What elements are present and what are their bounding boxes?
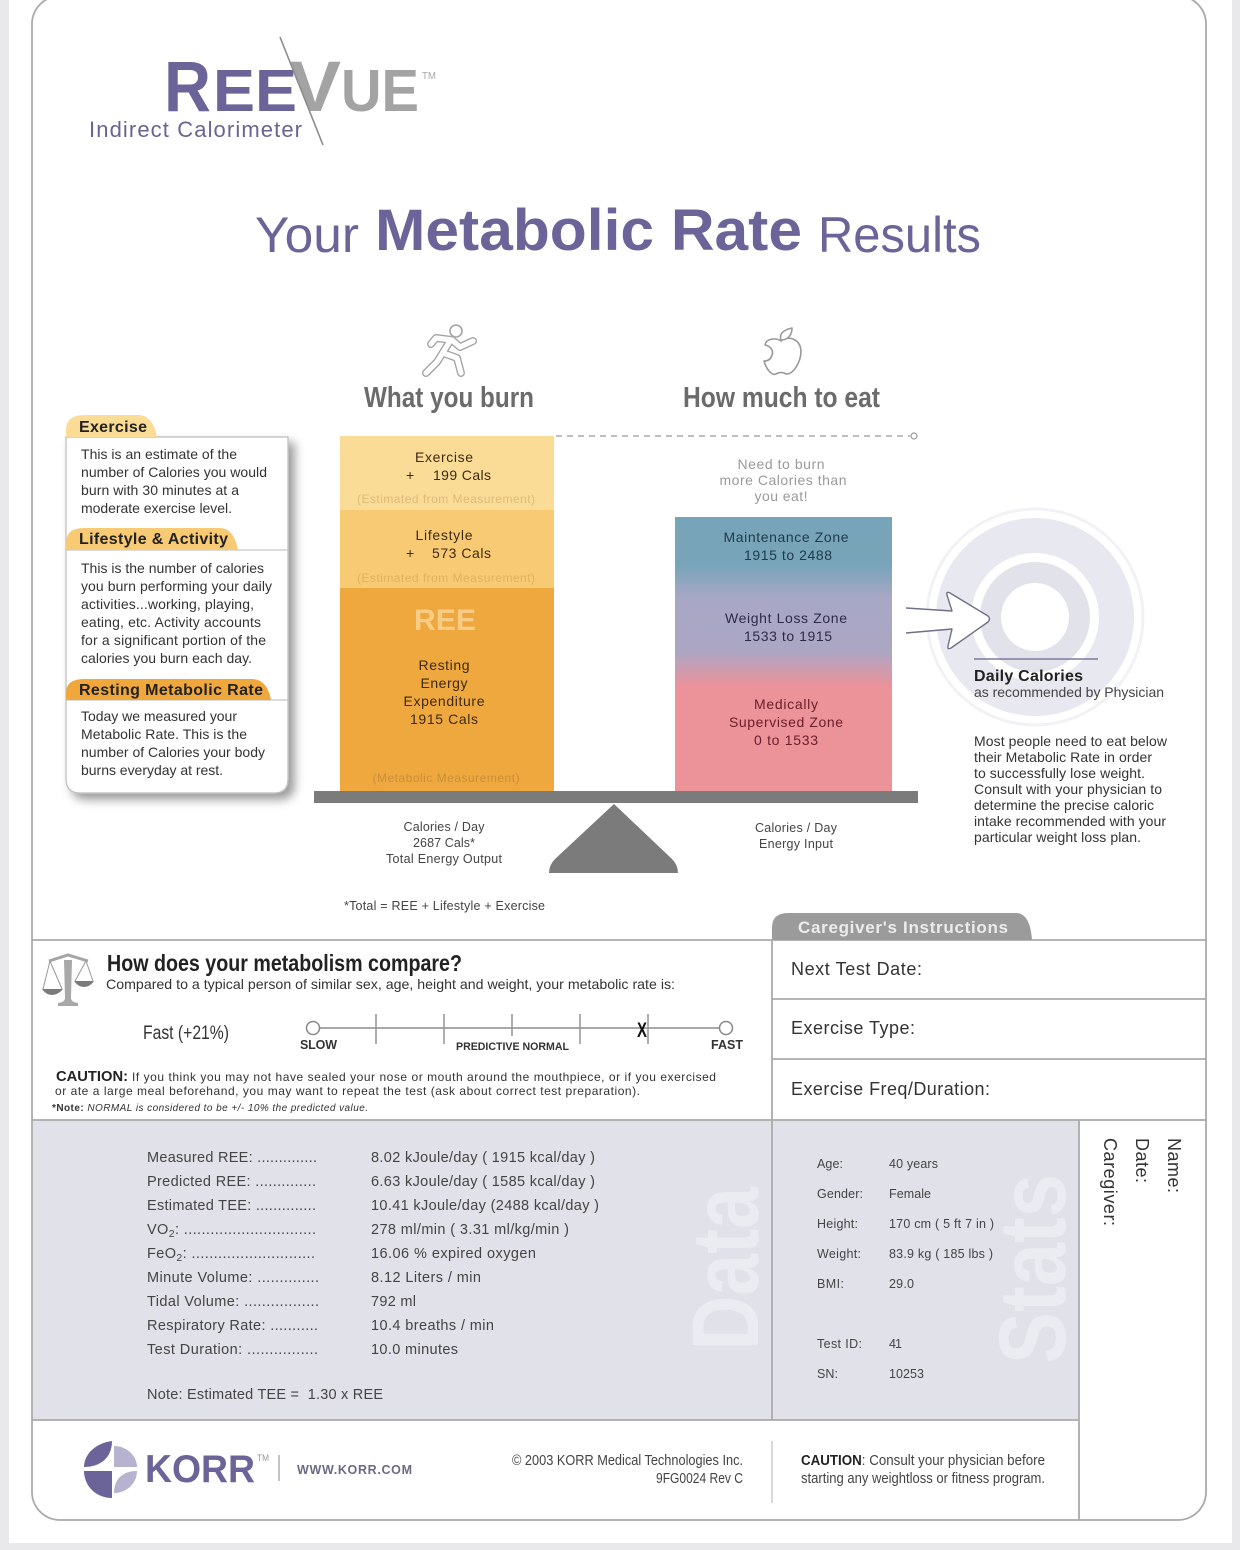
chart: calories burned stack: Exercise [415,449,473,465]
text: name, date, caregiver: Date: [1132,1138,1152,1183]
text: eating advice: particular weight loss plan. [974,829,1141,845]
panel: measured data: FeO [147,1246,176,1262]
chart: calories burned stack: 1915 Cals [410,711,478,727]
panel: measured data: 8.12 Liters / min [371,1270,481,1286]
panel: patient stats: 41 [889,1337,902,1351]
panel: measured data: 2 [176,1252,182,1264]
chart: calories burned stack: Expenditure [404,693,485,709]
panel: measured data: 792 ml [371,1294,416,1310]
text: need to burn: you eat! [754,488,808,504]
chart: metabolism slider [300,1014,743,1053]
panel: definitions: number of Calories you would [81,464,267,480]
text: eating advice: determine the precise caloric [974,797,1154,813]
panel: patient stats: 170 cm ( 5 ft 7 in ) [889,1217,994,1231]
panel: definitions: activities...working, playing, [81,596,254,612]
text: name, date, caregiver: Name: [1164,1138,1184,1193]
icon: target [927,509,1143,725]
dashed level line [556,433,917,439]
chart: calories burned stack: Lifestyle [416,527,473,543]
text: energy output: Total Energy Output [386,852,503,866]
chart: calorie zones stack: 1915 to 2488 [744,547,832,563]
text: name, date, caregiver [1100,1138,1184,1226]
chart: calories burned stack: + [406,467,414,483]
text: eating advice: Most people need to eat below [974,733,1168,749]
logo: ReeVue Indirect Calorimeter: R [164,48,211,127]
panel: definitions [66,415,288,793]
panel: measured data [147,1150,599,1403]
chart: calorie zones stack: 0 to 1533 [754,732,818,748]
text: comparison intro: Compared to a typical person of similar sex, age, height and weight, your metabolic rate is: [106,976,675,992]
panel: definitions: This is an estimate of the [81,446,237,462]
text: energy output: Calories / Day [404,820,485,834]
panel: measured data: Respiratory Rate: ........... [147,1318,318,1334]
panel: definitions: This is the number of calories [81,560,264,576]
panel: definitions: Today we measured your [81,708,237,724]
panel: measured data: 10.41 kJoule/day (2488 kcal/day ) [371,1198,599,1214]
icon: apple [764,328,801,374]
watermark: Stats: Stats [980,1174,1086,1364]
chart: calorie zones stack: 1533 to 1915 [744,628,832,644]
chart: metabolism slider: X [637,1019,647,1042]
icon: runner [426,325,473,373]
chart: calories burned stack: Resting [418,657,470,673]
panel: patient stats: 29.0 [889,1277,914,1291]
panel: patient stats: Test ID: [817,1337,862,1351]
chart: calories burned stack: REE [414,604,476,637]
panel: measured data: 8.02 kJoule/day ( 1915 kcal/day ) [371,1150,595,1166]
panel: measured data: Measured REE: .............. [147,1150,317,1166]
text: footer caution: CAUTION: Consult your physician before [801,1453,1045,1469]
panel: measured data: 6.63 kJoule/day ( 1585 kcal/day ) [371,1174,595,1190]
panel: measured data: : .............................. [175,1222,316,1238]
chart: calorie zones stack [675,517,892,791]
text: footer caution: starting any weightloss or fitness program. [801,1471,1045,1487]
chart: metabolism slider: PREDICTIVE NORMAL [456,1041,569,1053]
panel: measured data: Predicted REE: .............. [147,1174,316,1190]
panel: definitions: for a significant portion of the [81,632,266,648]
chart: calories burned stack: (Metabolic Measurement) [372,771,520,785]
panel: caregiver instructions: Next Test Date: [791,959,922,979]
title [255,198,981,263]
text: daily calories [974,659,1164,700]
text: caution: If you think you may not have sealed your nose or mouth around the mouthpiece, or if you exercised [132,1070,716,1084]
icon: scales [42,955,94,1006]
chart: calorie zones stack: Maintenance Zone [724,529,849,545]
text: copyright: 9FG0024 Rev C [656,1471,743,1487]
text: eating advice: intake recommended with your [974,813,1166,829]
text: energy input: Calories / Day [755,821,838,835]
text: daily calories: as recommended by Physician [974,684,1164,700]
panel: definitions: moderate exercise level. [81,500,232,516]
chart: calorie zones stack: Weight Loss Zone [725,610,847,626]
panel: patient stats: Gender: [817,1187,863,1201]
logo: KORR [84,1441,412,1498]
chart: calories burned stack: Energy [420,675,468,691]
panel: definitions: Resting Metabolic Rate [79,682,263,699]
panel: patient stats [817,1157,994,1381]
logo: KORR: TM [257,1453,269,1463]
footnote: total formula: *Total = REE + Lifestyle + Exercise [344,899,545,913]
text: eating advice: their Metabolic Rate in order [974,749,1152,765]
panel: caregiver instructions [772,913,1032,1099]
panel: definitions: Exercise [79,419,147,436]
text: caution [52,1069,716,1114]
panel: definitions: you burn performing your daily [81,578,272,594]
panel: measured data: VO [147,1222,168,1238]
panel: patient stats: 83.9 kg ( 185 lbs ) [889,1247,993,1261]
chart: calories burned stack: (Estimated from Measurement) [357,571,535,585]
panel: definitions: Metabolic Rate. This is the [81,726,247,742]
panel: measured data: Minute Volume: .............. [147,1270,319,1286]
text: caution: or ate a large meal beforehand, you may want to repeat the test (ask about correct test preparation). [55,1084,640,1098]
chart: calories burned stack: + [406,545,414,561]
title: Metabolic Rate [375,198,802,263]
panel: patient stats: 40 years [889,1157,938,1171]
panel: patient stats: Weight: [817,1247,861,1261]
panel: definitions: burn with 30 minutes at a [81,482,239,498]
chart: calories burned stack: 199 Cals [433,467,491,483]
title: Results [818,207,981,263]
panel: measured data: 10.4 breaths / min [371,1318,494,1334]
panel: definitions: eating, etc. Activity accounts [81,614,261,630]
text: energy input: Energy Input [759,837,834,851]
panel: patient stats: SN: [817,1367,838,1381]
text: energy output [386,820,503,866]
chart: metabolism slider: FAST [711,1038,743,1052]
panel: measured data: Tidal Volume: ................. [147,1294,319,1310]
panel: measured data: 16.06 % expired oxygen [371,1246,536,1262]
text: daily calories: Daily Calories [974,668,1083,685]
chart: calorie zones stack: Medically [754,696,818,712]
text: need to burn: more Calories than [720,472,846,488]
text: copyright: © 2003 KORR Medical Technologies Inc. [512,1453,743,1469]
panel: measured data: Note: Estimated TEE = 1.30 x REE [147,1387,383,1403]
logo: KORR: KORR [145,1448,255,1491]
arrow to target [906,592,990,649]
panel: measured data: Estimated TEE: .............. [147,1198,316,1214]
logo: ReeVue Indirect Calorimeter [89,37,436,145]
panel: patient stats: BMI: [817,1277,844,1291]
panel: measured data: 278 ml/min ( 3.31 ml/kg/min ) [371,1222,569,1238]
panel: definitions: Lifestyle & Activity [79,531,228,548]
text: name, date, caregiver: Caregiver: [1100,1138,1120,1226]
watermark: Data: Data [673,1186,779,1350]
logo: ReeVue Indirect Calorimeter: V [289,48,341,127]
text: energy input [755,821,838,851]
heading: what you burn: What you burn [364,382,534,414]
logo: ReeVue Indirect Calorimeter: EE [213,58,297,124]
chart: calories burned stack: (Estimated from Measurement) [357,492,535,506]
title: Your [255,207,359,263]
text: result: Fast (+21%) [143,1023,229,1044]
panel: patient stats: Female [889,1187,931,1201]
panel: data background [33,1120,1079,1420]
balance scale beam and fulcrum [314,791,918,873]
panel: measured data: 2 [169,1228,175,1240]
text: need to burn: Need to burn [738,456,824,472]
text: energy output: 2687 Cals* [413,836,475,850]
text: need to burn [720,456,846,504]
panel: patient stats: Age: [817,1157,843,1171]
panel: patient stats: Height: [817,1217,858,1231]
chart: calories burned stack: 573 Cals [432,545,491,561]
text: eating advice: to successfully lose weight. [974,765,1145,781]
chart: metabolism slider: SLOW [300,1038,337,1052]
text: eating advice: Consult with your physician to [974,781,1162,797]
panel: measured data: Test Duration: ................ [147,1342,318,1358]
chart: calorie zones stack: Supervised Zone [729,714,843,730]
logo: ReeVue Indirect Calorimeter: TM [422,71,436,82]
panel: definitions: number of Calories your body [81,744,265,760]
text: footer caution [801,1453,1045,1487]
panel: measured data: : ............................ [183,1246,315,1262]
panel: measured data: 10.0 minutes [371,1342,458,1358]
panel: caregiver instructions: Exercise Type: [791,1018,915,1038]
logo: KORR: WWW.KORR.COM [297,1463,412,1477]
panel: definitions: burns everyday at rest. [81,762,223,778]
panel: definitions: calories you burn each day. [81,650,252,666]
panel: patient stats: 10253 [889,1367,924,1381]
heading: metabolism compare: How does your metabolism compare? [107,950,462,976]
heading: how much to eat: How much to eat [683,382,880,414]
text: eating advice [974,733,1168,845]
text: copyright [512,1453,743,1487]
chart: calories burned stack [340,436,554,791]
text: caution: CAUTION: [56,1069,128,1085]
panel: caregiver instructions: Caregiver's Instructions [798,918,1008,937]
panel: caregiver instructions: Exercise Freq/Duration: [791,1079,990,1099]
logo: ReeVue Indirect Calorimeter: Indirect Calorimeter [89,117,302,142]
logo: ReeVue Indirect Calorimeter: UE [341,58,419,124]
text: caution: *Note: NORMAL is considered to be +/- 10% the predicted value. [52,1103,368,1114]
